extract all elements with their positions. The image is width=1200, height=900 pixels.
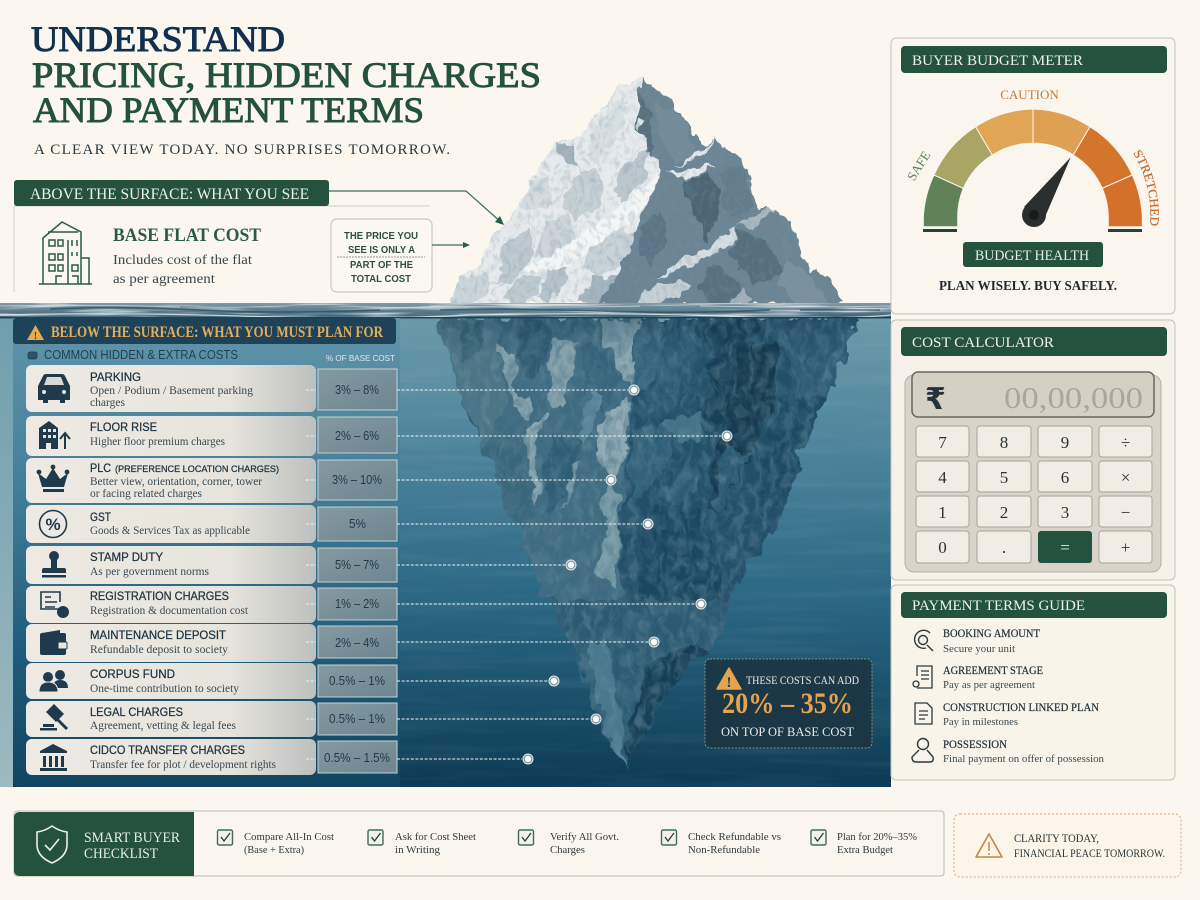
meter header [901, 46, 1167, 73]
row: CIDCO transfer: Transfer fee for plot / development rights [90, 759, 277, 771]
row: corpus fund: CORPUS FUND [90, 667, 175, 681]
gauge needle [1022, 157, 1071, 227]
water surface band [0, 303, 891, 318]
calculator display [912, 372, 1154, 417]
calculator keys: 4 [938, 468, 947, 487]
section header: ABOVE THE SURFACE: WHAT YOU SEE [30, 186, 309, 203]
row: stamp duty: As per government norms [90, 566, 210, 578]
arrow: header to iceberg [329, 191, 504, 225]
base flat cost text: Includes cost of the flat [113, 253, 252, 268]
section header [13, 318, 396, 344]
item: construction linked plan: Pay in milestones [943, 716, 1018, 728]
gauge labels [904, 87, 1159, 226]
row: corpus fund: 0.5% – 1% [329, 673, 385, 688]
row: stamp duty [26, 546, 576, 584]
subheading: common hidden costs: COMMON HIDDEN & EXTRA COSTS [44, 348, 238, 362]
callout: 20-35 percent extra [705, 659, 872, 748]
arrow: callout to iceberg [432, 242, 470, 248]
row: CIDCO transfer [26, 739, 533, 775]
row: PLC [26, 458, 616, 503]
row: floor rise: FLOOR RISE [90, 420, 157, 434]
row: GST: % [45, 515, 61, 534]
row: legal charges [26, 701, 601, 737]
title [31, 19, 541, 130]
meter caption: PLAN WISELY. BUY SAFELY. [939, 278, 1117, 293]
calculator keys: 1 [938, 503, 947, 522]
panel: payment terms guide [891, 585, 1175, 780]
calculator keys: + [1121, 538, 1130, 557]
row: maintenance deposit: MAINTENANCE DEPOSIT [90, 628, 227, 642]
callout: price you see: THE PRICE YOU [344, 230, 418, 242]
row: parking: Open / Podium / Basement parking [90, 385, 253, 397]
title: AND PAYMENT TERMS [33, 90, 424, 130]
item: agreement stage: Pay as per agreement [943, 679, 1035, 691]
row: floor rise: Higher floor premium charges [90, 436, 226, 448]
check item 1: Compare All-In Cost [244, 831, 334, 843]
row: legal charges: 0.5% – 1% [329, 711, 385, 726]
row: PLC: PLC [90, 461, 111, 475]
row: registration: Registration & documentation cost [90, 605, 249, 617]
icon: warning: ! [726, 675, 732, 691]
check item 2: Ask for Cost Sheet [395, 831, 476, 843]
row: corpus fund [26, 663, 559, 699]
item: booking amount [915, 628, 1040, 655]
item: possession: POSSESSION [943, 739, 1008, 751]
callout: 20-35 percent extra: ON TOP OF BASE COST [721, 724, 854, 739]
calculator display: ₹ [925, 382, 946, 417]
payment header: PAYMENT TERMS GUIDE [912, 598, 1085, 614]
right shaded mass [597, 77, 847, 307]
payment header [901, 592, 1167, 618]
check item 2 [368, 830, 476, 856]
iceberg above water [440, 70, 850, 310]
check item 4 [662, 830, 781, 856]
row: corpus fund: One-time contribution to society [90, 683, 239, 695]
subtitle: A CLEAR VIEW TODAY. NO SURPRISES TOMORROW. [34, 142, 450, 158]
callout: clarity today: CLARITY TODAY, [1014, 831, 1099, 845]
item: possession: Final payment on offer of possession [943, 753, 1104, 765]
iceberg below water [430, 315, 865, 775]
section header: BELOW THE SURFACE: WHAT YOU MUST PLAN FOR [51, 324, 384, 341]
calculator keys [916, 426, 1152, 563]
calculator keys: 3 [1061, 503, 1069, 522]
calculator body [905, 375, 1161, 572]
calculator keys: 6 [1061, 468, 1069, 487]
icon: warning outline [976, 834, 1002, 857]
calculator keys: = [1060, 538, 1070, 557]
calculator display: 00,00,000 [1004, 380, 1143, 415]
row: legal charges: LEGAL CHARGES [90, 705, 183, 719]
callout: 20-35 percent extra: 20% – 35% [722, 687, 853, 720]
row: maintenance deposit: Refundable deposit to society [90, 644, 228, 656]
callout: clarity today [954, 814, 1181, 877]
checklist label [14, 812, 194, 876]
title: UNDERSTAND [31, 19, 285, 59]
row: registration: 1% – 2% [335, 596, 379, 611]
item: agreement stage [913, 665, 1043, 691]
row: PLC: Better view, orientation, corner, tower [90, 476, 262, 488]
panel: above the surface [14, 180, 504, 292]
calculator header: COST CALCULATOR [912, 335, 1054, 351]
calculator keys: 0 [938, 538, 947, 557]
icon: warning [717, 668, 741, 691]
section header [14, 180, 329, 206]
calculator keys: × [1121, 468, 1130, 487]
row: GST: 5% [349, 516, 366, 531]
row: floor rise [26, 416, 732, 456]
calculator header [901, 327, 1167, 356]
calculator keys: 5 [1000, 468, 1008, 487]
base flat cost text: as per agreement [113, 272, 215, 287]
check item 5: Extra Budget [837, 844, 893, 856]
icon: building [39, 222, 92, 284]
callout: price you see [331, 219, 432, 292]
subheading: common hidden costs [28, 348, 395, 363]
row: maintenance deposit: 2% – 4% [335, 635, 379, 650]
title: PRICING, HIDDEN CHARGES [32, 55, 541, 95]
row: PLC: 3% – 10% [332, 472, 382, 487]
panel: cost calculator [891, 320, 1175, 580]
item: booking amount: BOOKING AMOUNT [943, 628, 1040, 640]
row: GST: GST [90, 510, 112, 524]
check item 1: (Base + Extra) [244, 844, 304, 856]
budget health label: BUDGET HEALTH [975, 248, 1089, 264]
budget health label [963, 242, 1103, 267]
row: legal charges: Agreement, vetting & legal fees [90, 720, 237, 732]
row: GST: Goods & Services Tax as applicable [90, 525, 250, 537]
calculator keys: 7 [938, 433, 947, 452]
row: CIDCO transfer: CIDCO TRANSFER CHARGES [90, 743, 245, 757]
section header: ! [34, 331, 37, 342]
row: GST [26, 505, 653, 543]
check item 5 [811, 830, 917, 856]
row: parking: PARKING [90, 370, 141, 384]
panel body [14, 206, 430, 292]
row: parking [26, 365, 639, 412]
row: PLC: (PREFERENCE LOCATION CHARGES) [115, 464, 279, 475]
row: registration: REGISTRATION CHARGES [90, 589, 229, 603]
calculator keys: 9 [1061, 433, 1069, 452]
item: construction linked plan: CONSTRUCTION LINKED PLAN [943, 702, 1100, 714]
check item 4: Non-Refundable [688, 844, 760, 856]
gauge [923, 109, 1142, 227]
calculator keys: 8 [1000, 433, 1008, 452]
panel body [13, 318, 400, 787]
check item 1 [218, 830, 334, 856]
item: construction linked plan [915, 702, 1100, 728]
check item 3: Charges [550, 844, 585, 856]
item: agreement stage: AGREEMENT STAGE [943, 665, 1043, 677]
check item 3: Verify All Govt. [550, 831, 619, 843]
calculator keys: . [1002, 538, 1006, 557]
row: registration [26, 586, 706, 623]
calculator keys: 2 [1000, 503, 1008, 522]
callout: price you see: PART OF THE [350, 259, 413, 271]
callout: price you see: SEE IS ONLY A [348, 244, 415, 256]
row: parking: 3% – 8% [335, 382, 379, 397]
row: maintenance deposit [26, 624, 659, 662]
panel: smart buyer checklist [14, 811, 944, 876]
checklist label: CHECKLIST [84, 846, 158, 862]
base flat cost text [113, 225, 261, 287]
calculator keys: ÷ [1121, 433, 1130, 452]
row: floor rise: 2% – 6% [335, 428, 379, 443]
meter header: BUYER BUDGET METER [912, 53, 1083, 69]
panel: below the surface [13, 318, 732, 787]
row: CIDCO transfer: 0.5% – 1.5% [324, 750, 390, 765]
row: stamp duty: 5% – 7% [335, 557, 379, 572]
row: PLC: or facing related charges [90, 488, 203, 500]
callout: price you see: TOTAL COST [351, 273, 412, 285]
panel: buyer budget meter [890, 38, 1176, 314]
item: booking amount: Secure your unit [943, 643, 1015, 655]
callout: clarity today: FINANCIAL PEACE TOMORROW. [1014, 846, 1165, 860]
check item 2: in Writing [395, 844, 440, 856]
check item 3 [518, 830, 619, 856]
row: parking: charges [90, 397, 126, 409]
subheading: common hidden costs: % OF BASE COST [326, 353, 395, 363]
base flat cost text: BASE FLAT COST [113, 225, 261, 246]
checklist label: SMART BUYER [84, 830, 180, 846]
gauge labels: CAUTION [1000, 87, 1059, 102]
row: stamp duty: STAMP DUTY [90, 550, 163, 564]
callout: 20-35 percent extra: THESE COSTS CAN ADD [746, 673, 859, 687]
gauge labels: SAFE [904, 148, 933, 183]
water background [0, 318, 891, 787]
gauge labels: STRETCHED [1134, 150, 1159, 226]
gauge base bars [923, 229, 1142, 232]
check item 5: Plan for 20%–35% [837, 831, 917, 843]
item: possession [912, 738, 1104, 765]
calculator keys: − [1121, 503, 1130, 522]
check item 4: Check Refundable vs [688, 831, 781, 843]
